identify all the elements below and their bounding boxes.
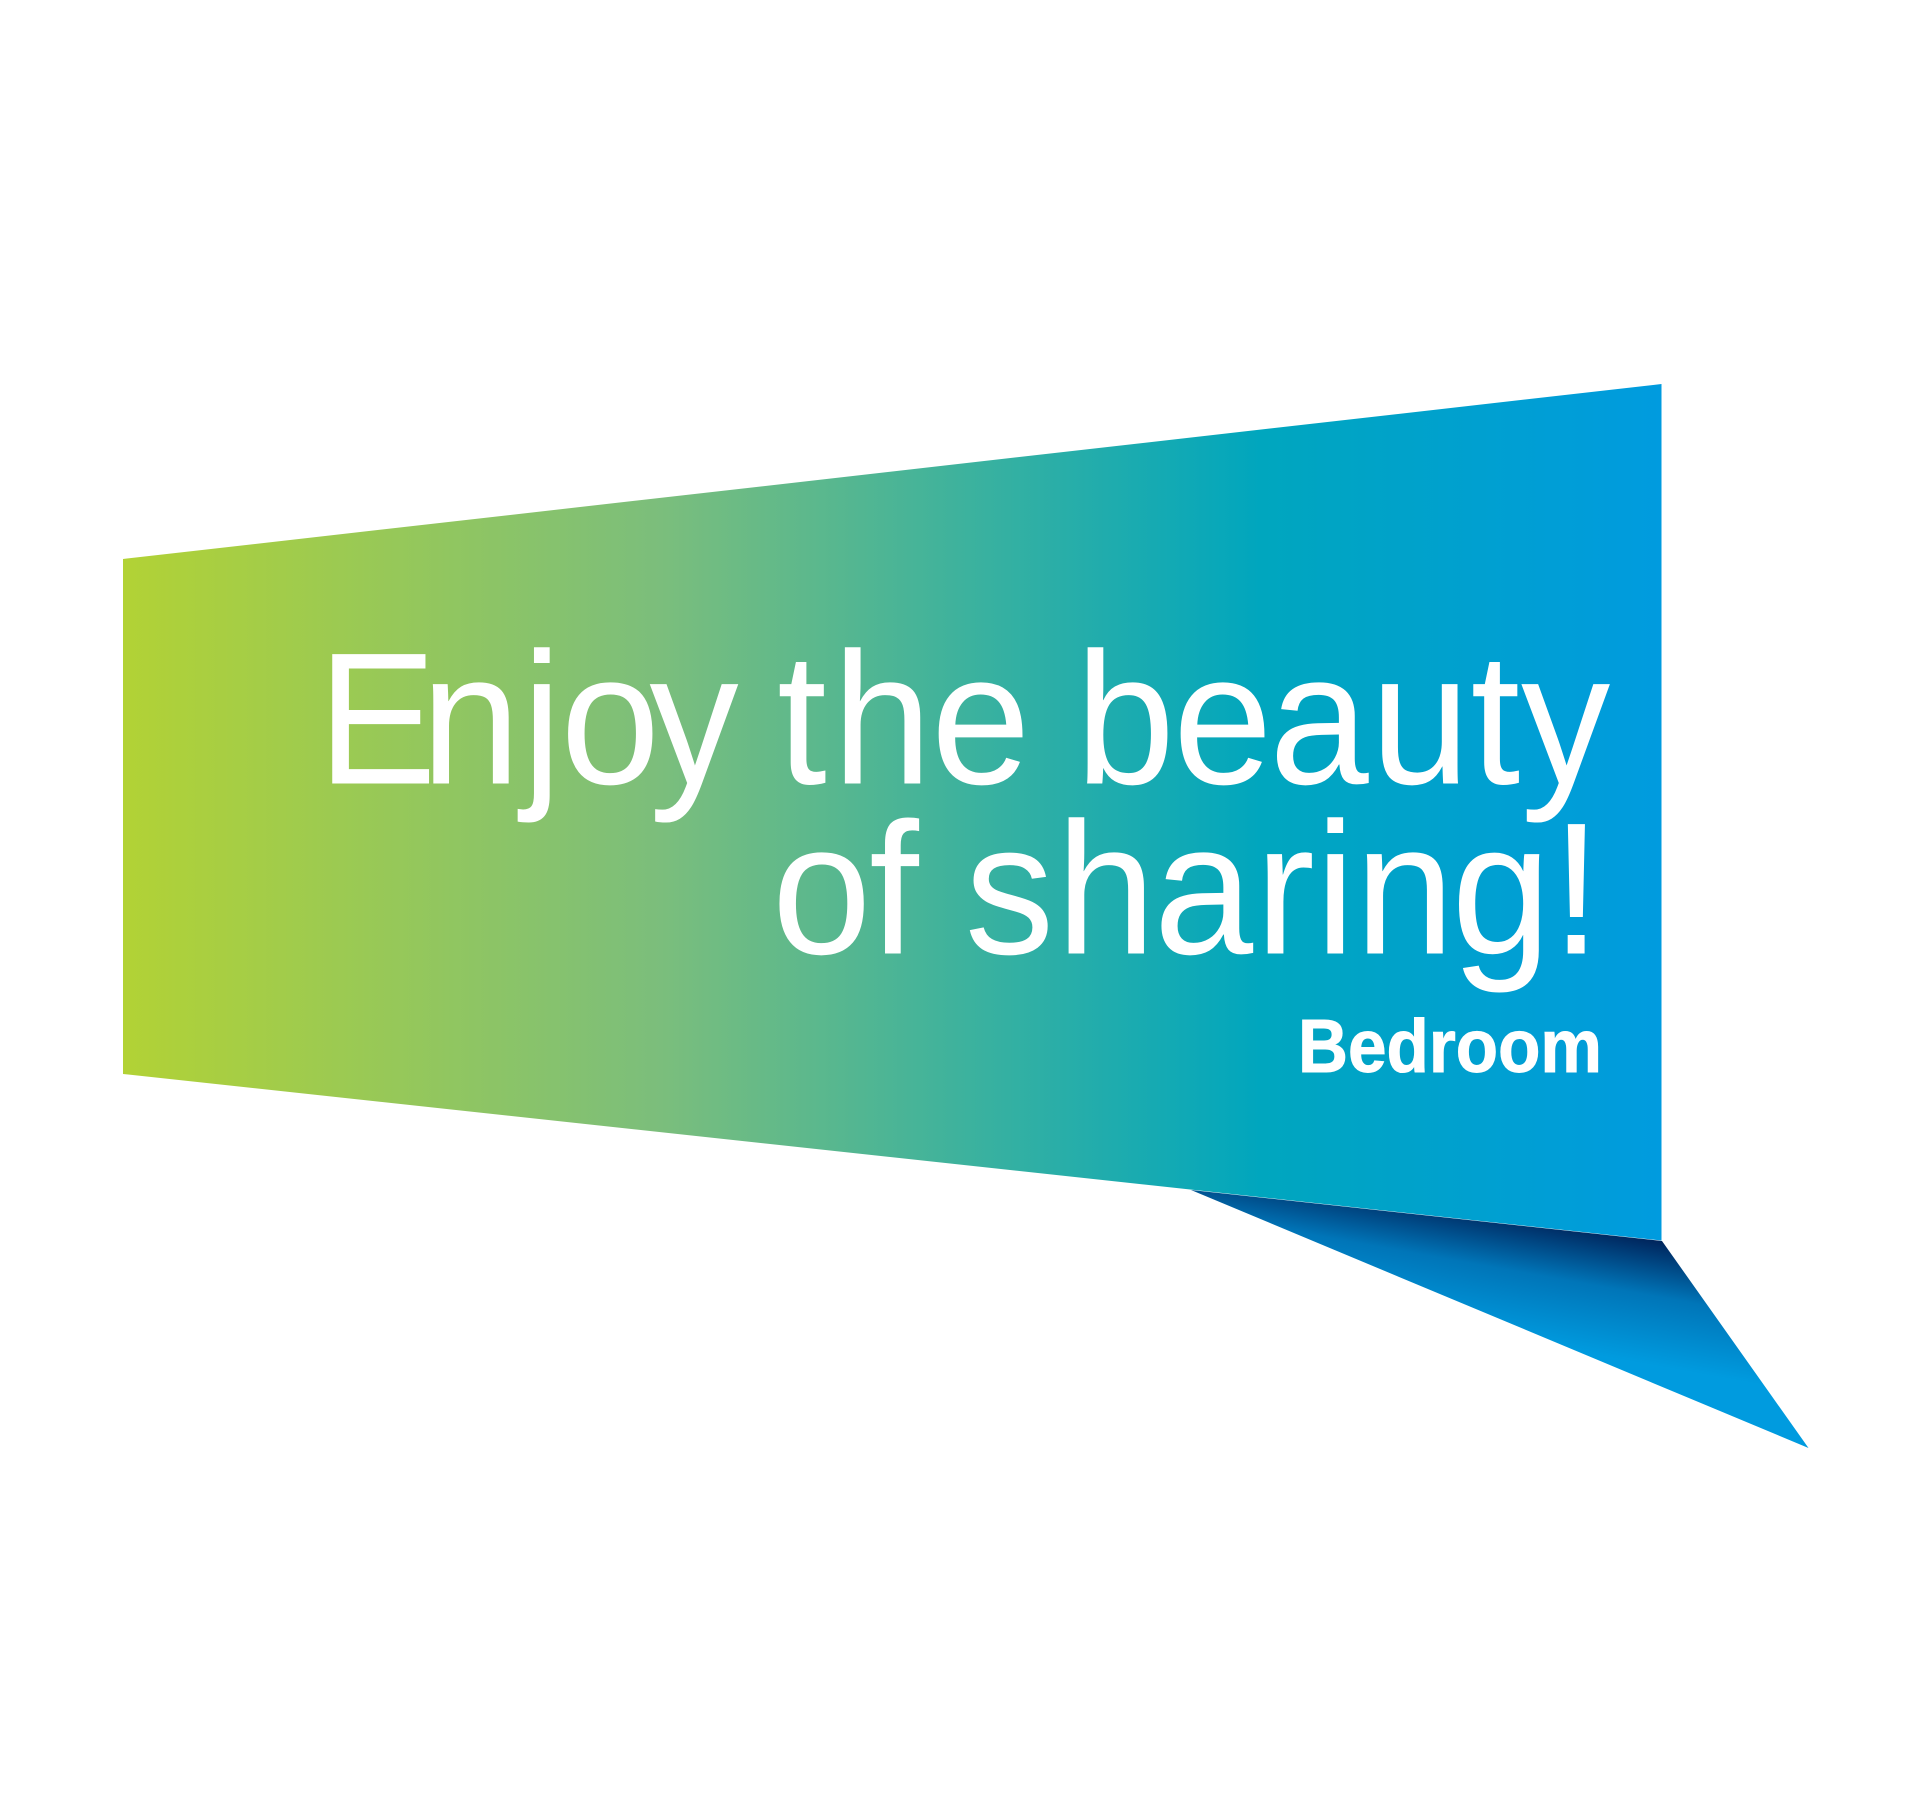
headline text bbox=[318, 613, 1611, 993]
headline line 1: Enjoy the beauty bbox=[318, 613, 1611, 823]
headline line 2: of sharing! bbox=[772, 783, 1601, 993]
room label: Bedroom bbox=[1298, 1004, 1602, 1088]
banner tail bbox=[1191, 1190, 1808, 1448]
banner panel bbox=[123, 384, 1662, 1240]
